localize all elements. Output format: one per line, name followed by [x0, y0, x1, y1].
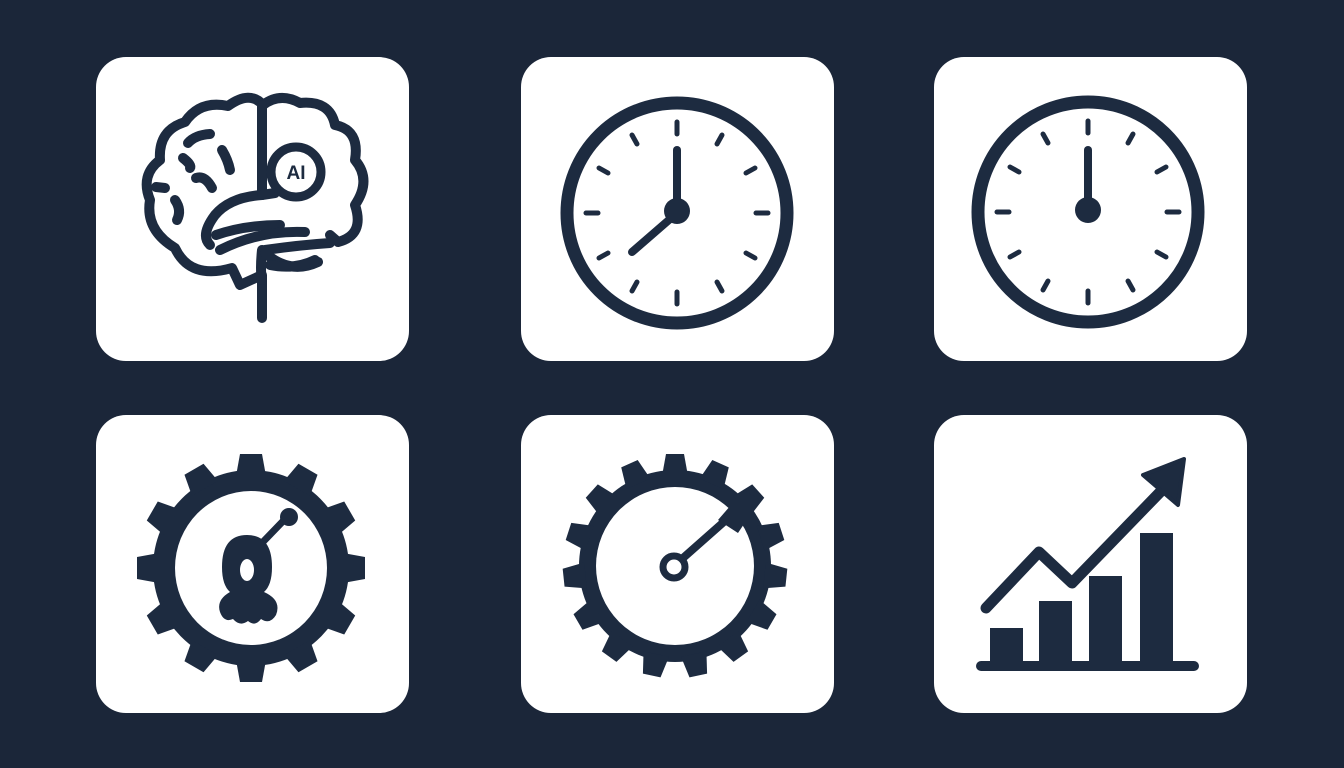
icon: clock 7 o'clock: [567, 103, 787, 323]
icon: AI badge: AI: [286, 163, 306, 184]
icon: robot figure: [219, 508, 298, 624]
bar chart: [976, 533, 1199, 671]
arrow: trend line: [986, 459, 1184, 608]
panel: growth chart: [934, 415, 1247, 713]
panel: clock twelve: [934, 57, 1247, 361]
icon: gear: [562, 454, 788, 678]
icon: clock 12 o'clock: [978, 102, 1198, 322]
panel: brain AI: [96, 57, 409, 361]
icon: AI badge: [271, 147, 321, 197]
panel: clock seven: [521, 57, 834, 361]
panel: gear with robot: [96, 415, 409, 713]
icon: brain: [147, 98, 364, 318]
icon: gear: [137, 454, 365, 682]
icon: probe: [663, 490, 760, 578]
panel: gear with probe: [521, 415, 834, 713]
